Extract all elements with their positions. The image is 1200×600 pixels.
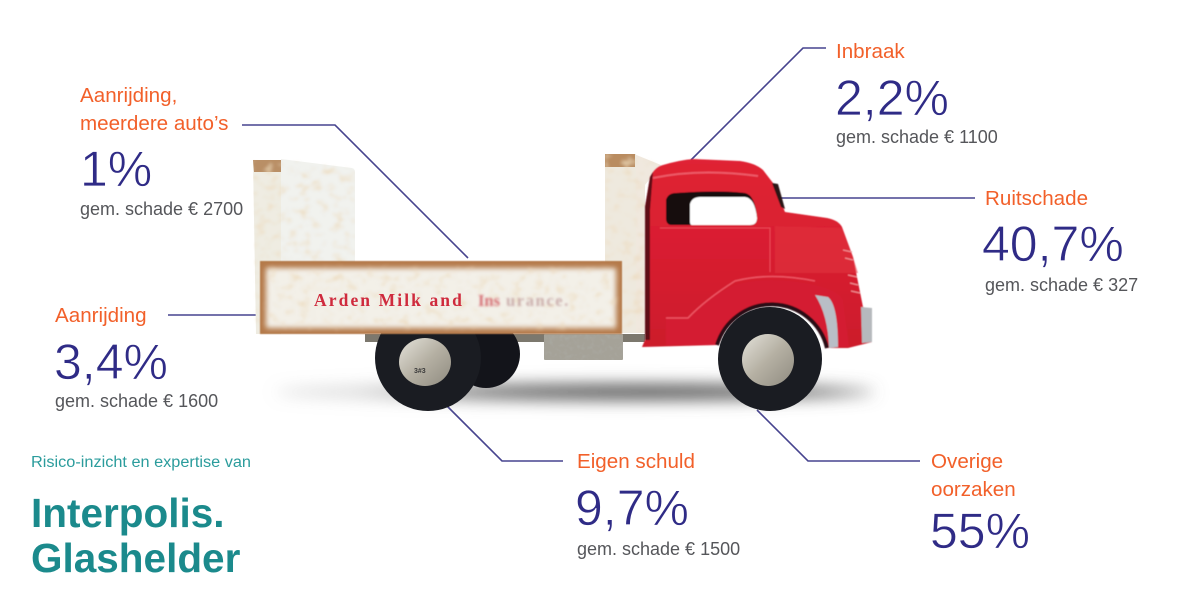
- label: Aanrijding: gem. schade € 1600: [55, 391, 218, 411]
- label: Overige oorzaken: 55%: [930, 503, 1030, 559]
- label: Aanrijding, meerdere auto's: Aanrijding,: [80, 84, 177, 107]
- label: Aanrijding: 3,4%: [54, 334, 168, 390]
- side window: [772, 183, 785, 209]
- label: Aanrijding, meerdere auto's: [80, 84, 243, 219]
- worn paint: [815, 295, 838, 348]
- bumper: [861, 307, 872, 343]
- connector lines: [168, 48, 975, 461]
- chassis: [365, 334, 645, 360]
- label: Eigen schuld: [575, 450, 740, 559]
- rear wheels: 3#3: [414, 368, 426, 375]
- rear board: [253, 159, 355, 334]
- door seam: [660, 228, 770, 272]
- logo: Interpolis Glashelder: [31, 454, 251, 581]
- label: Ruitschade: 40,7%: [982, 216, 1124, 272]
- cab: [642, 159, 872, 348]
- label: Inbraak: 2,2%: [835, 70, 949, 126]
- label: Inbraak: gem. schade € 1100: [836, 127, 998, 147]
- window: [666, 192, 757, 225]
- hood shading: [775, 226, 858, 273]
- label: Ruitschade: Ruitschade: [985, 187, 1088, 210]
- front wheel: [718, 307, 822, 411]
- wheel arch: [717, 304, 827, 348]
- label: Ruitschade: [982, 187, 1138, 295]
- label: Aanrijding: Aanrijding: [55, 304, 147, 327]
- side board with text: [260, 261, 622, 334]
- side board with text: urance.: [506, 291, 570, 310]
- label: Ruitschade: gem. schade € 327: [985, 275, 1138, 295]
- side board with text: Arden Milk and: [314, 290, 464, 310]
- logo: Interpolis Glashelder: Interpolis.: [31, 490, 225, 536]
- label: Eigen schuld: Eigen schuld: [577, 450, 695, 473]
- label: Inbraak: Inbraak: [836, 40, 905, 63]
- front post: [605, 154, 661, 333]
- fender: [666, 280, 849, 347]
- label: Overige oorzaken: Overige: [931, 450, 1003, 473]
- logo: Interpolis Glashelder: Risico-inzicht en expertise van: [31, 454, 251, 471]
- label: Aanrijding: [54, 304, 218, 411]
- side board with text: Ins: [478, 291, 501, 310]
- label: Overige oorzaken: [930, 450, 1030, 559]
- label: Aanrijding, meerdere auto's: gem. schade € 2700: [80, 199, 243, 219]
- label: Overige oorzaken: oorzaken: [931, 478, 1016, 501]
- rear wheels: [375, 305, 520, 411]
- label: Eigen schuld: gem. schade € 1500: [577, 539, 740, 559]
- label: Eigen schuld: 9,7%: [575, 480, 689, 536]
- label: Inbraak: [835, 40, 998, 147]
- label: Aanrijding, meerdere auto's: meerdere auto’s: [80, 112, 228, 135]
- label: Aanrijding, meerdere auto's: 1%: [80, 141, 152, 197]
- ground shadow: [275, 383, 875, 401]
- grille: [843, 250, 860, 293]
- icon: toy truck: [253, 154, 875, 411]
- logo: Interpolis Glashelder: Glashelder: [31, 535, 241, 581]
